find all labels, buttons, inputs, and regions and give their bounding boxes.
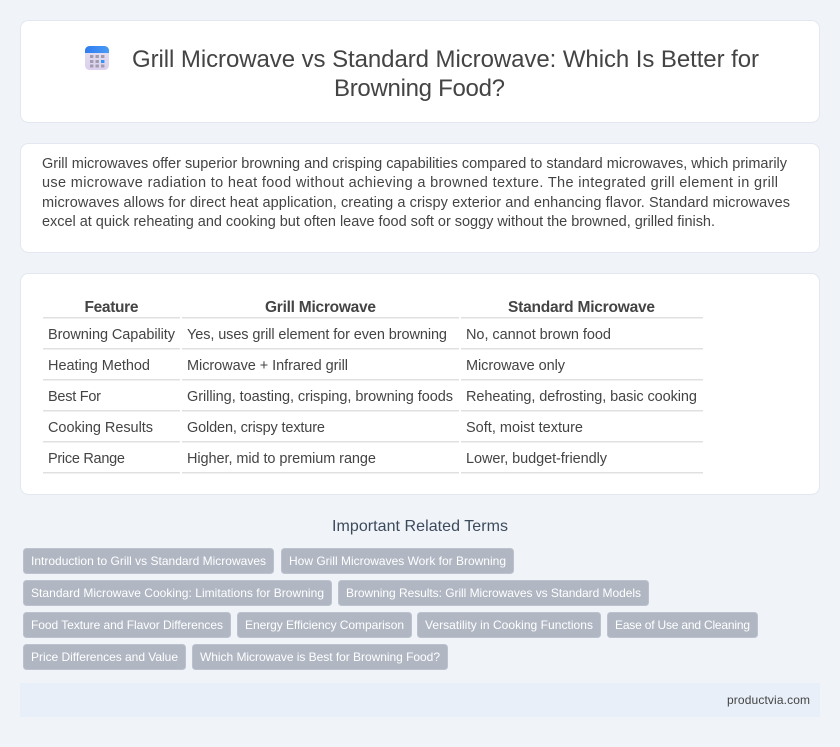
tag: Standard Microwave Cooking: Limitations for Browning <box>31 586 324 600</box>
tag <box>238 612 412 638</box>
text block: summary <box>42 156 790 230</box>
table row: price range: Higher, mid to premium range <box>187 451 376 467</box>
related term tags <box>24 548 758 670</box>
table header: Grill Microwave <box>265 299 376 316</box>
tag: How Grill Microwaves Work for Browning <box>289 554 506 568</box>
tag <box>24 548 274 574</box>
table row: heating method: Microwave only <box>466 358 566 374</box>
table row: best for: Reheating, defrosting, basic cooking <box>466 389 697 405</box>
table header: Feature <box>84 299 139 316</box>
tag <box>192 644 448 670</box>
table row: cooking results: Cooking Results <box>48 420 153 436</box>
table row: best for: Best For <box>48 389 101 405</box>
tag: Ease of Use and Cleaning <box>615 618 750 632</box>
tag <box>24 580 332 606</box>
text block: summary: Grill microwaves offer superior browning and crisping capabilities compared to standard microwaves, which primarily <box>42 156 788 172</box>
tag: Browning Results: Grill Microwaves vs Standard Models <box>346 586 641 600</box>
tag: Food Texture and Flavor Differences <box>31 618 223 632</box>
table row: heating method: Microwave + Infrared grill <box>187 358 348 374</box>
heading: important related terms: Important Related Terms <box>332 518 508 535</box>
text block: summary: microwaves allows for direct heat application, creating a crispy exterior and enhancing flavor. Standard microwaves <box>42 195 790 211</box>
table header <box>84 299 655 316</box>
tag: Versatility in Cooking Functions <box>425 618 593 632</box>
icon: calendar <box>85 46 109 70</box>
table row: browning capability: Browning Capability <box>48 327 176 343</box>
tag: Energy Efficiency Comparison <box>245 618 404 632</box>
panel: summary text <box>20 144 820 252</box>
table rules <box>43 317 703 474</box>
tag: Price Differences and Value <box>31 650 178 664</box>
title <box>132 46 759 102</box>
footer <box>20 683 820 717</box>
table row: heating method: Heating Method <box>48 358 150 374</box>
tag: Which Microwave is Best for Browning Food? <box>200 650 440 664</box>
text block: summary: excel at quick reheating and cooking but often leave food soft or soggy without the browned, grilled finish. <box>42 214 715 230</box>
tag <box>338 580 648 606</box>
table row: best for <box>48 389 697 405</box>
tag: Introduction to Grill vs Standard Microwaves <box>31 554 266 568</box>
table row: price range: Lower, budget-friendly <box>466 451 608 467</box>
table row: cooking results <box>48 420 583 436</box>
table row: browning capability: No, cannot brown food <box>466 327 611 343</box>
table row: best for: Grilling, toasting, crisping, browning foods <box>187 389 453 405</box>
table header: Standard Microwave <box>508 299 655 316</box>
tag <box>282 548 514 574</box>
table row: heating method <box>48 358 566 374</box>
table row: price range: Price Range <box>48 451 125 467</box>
tag <box>24 612 230 638</box>
tag <box>608 612 758 638</box>
table row: cooking results: Soft, moist texture <box>466 420 583 436</box>
text block: summary: use microwave radiation to heat food without achieving a browned texture. The integrated grill element in grill <box>42 175 778 191</box>
tag <box>24 644 186 670</box>
panel: comparison table <box>20 274 820 494</box>
title: Browning Food? <box>334 75 505 102</box>
table row: cooking results: Golden, crispy texture <box>187 420 325 436</box>
footer: productvia.com <box>727 693 810 707</box>
table row: browning capability: Yes, uses grill element for even browning <box>187 327 447 343</box>
table row: price range <box>48 451 608 467</box>
tag <box>418 612 600 638</box>
panel: title card <box>20 20 820 122</box>
table row: browning capability <box>48 327 611 343</box>
title: Grill Microwave vs Standard Microwave: Which Is Better for <box>132 46 759 73</box>
